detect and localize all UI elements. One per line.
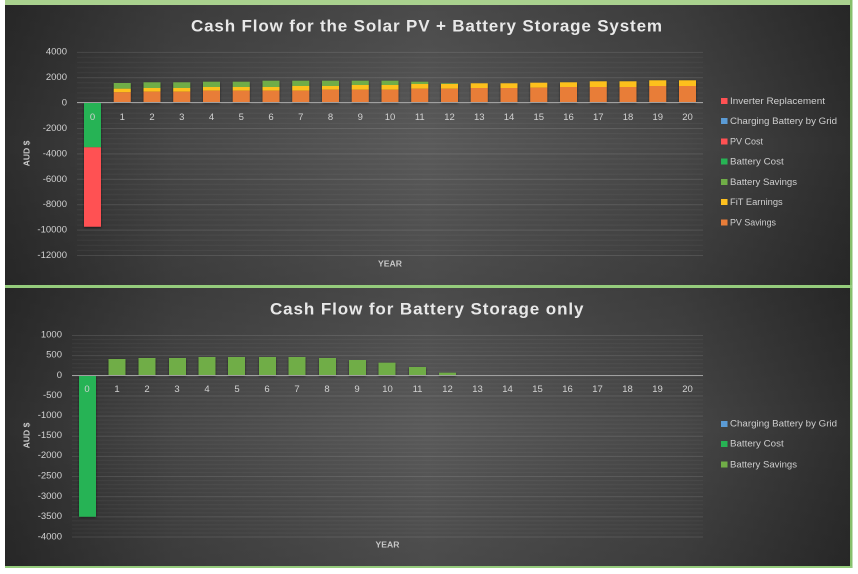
x axis labels: 12: [444, 112, 455, 123]
frame: top green border: [5, 0, 852, 5]
y axis labels: -3500: [38, 511, 62, 522]
x axis labels: 15: [533, 112, 544, 123]
y axis labels: -2000: [43, 123, 67, 134]
x axis labels: 5: [239, 112, 244, 123]
y axis labels: 4000: [46, 46, 67, 57]
y axis labels: 0: [62, 97, 67, 108]
x axis labels: 15: [532, 384, 543, 395]
x axis labels: 7: [298, 112, 303, 123]
x axis labels: 5: [234, 384, 240, 395]
y axis labels: -6000: [43, 174, 67, 185]
y axis title: AUD $: [22, 140, 32, 166]
x axis labels: 17: [593, 112, 604, 123]
x axis labels: 3: [174, 384, 180, 395]
legend: [721, 419, 837, 470]
x axis labels: 3: [179, 112, 184, 123]
x axis labels: 10: [385, 112, 395, 123]
y axis labels: 500: [46, 349, 62, 360]
x axis labels: 14: [502, 384, 513, 395]
y axis labels: -500: [43, 390, 62, 401]
stacked bar chart: [84, 80, 696, 227]
x axis labels: 8: [324, 384, 330, 395]
x axis labels: 16: [563, 112, 574, 123]
x axis labels: 0: [84, 384, 90, 395]
panel: solar PV plus battery cash flow: [5, 5, 850, 285]
legend: [721, 96, 837, 229]
panel: battery storage only cash flow: [5, 288, 850, 566]
x axis labels: 12: [442, 384, 453, 395]
x axis labels: 19: [652, 384, 663, 395]
y axis labels: -2000: [38, 450, 62, 461]
x axis labels: 20: [682, 112, 693, 123]
x axis labels: 4: [204, 384, 210, 395]
frame: right green border: [850, 0, 852, 568]
x axis labels: 13: [472, 384, 483, 395]
legend: Battery Cost: [730, 156, 784, 167]
legend: Charging Battery by Grid: [730, 116, 837, 127]
y axis labels: -3000: [38, 491, 62, 502]
y axis title: AUD $: [22, 422, 32, 448]
y axis labels: -8000: [43, 199, 67, 210]
x axis labels: 18: [623, 112, 633, 123]
legend: FiT Earnings: [730, 197, 783, 208]
x axis labels: 4: [209, 112, 214, 123]
y axis labels: -1500: [38, 430, 62, 441]
x axis labels: 6: [264, 384, 270, 395]
x axis labels: 6: [268, 112, 274, 123]
x axis labels: 11: [415, 112, 425, 123]
x axis labels: 10: [382, 384, 393, 395]
x axis labels: 1: [114, 384, 120, 395]
x axis labels: 7: [294, 384, 300, 395]
title: Cash Flow for Battery Storage only: [270, 300, 584, 318]
x axis labels: 9: [354, 384, 360, 395]
x axis labels: 17: [592, 384, 603, 395]
y axis labels: 1000: [41, 329, 62, 340]
legend: Charging Battery by Grid: [730, 419, 837, 430]
y axis labels: -4000: [43, 148, 67, 159]
x axis labels: 13: [474, 112, 485, 123]
x axis labels: 20: [682, 384, 693, 395]
x axis labels: 16: [562, 384, 573, 395]
legend: PV Savings: [730, 218, 776, 229]
bar chart: [79, 357, 456, 517]
x axis labels: 2: [144, 384, 150, 395]
y axis labels: -1000: [38, 410, 62, 421]
y axis labels: [37, 46, 67, 261]
panel background: [5, 5, 850, 285]
x axis labels: 2: [149, 112, 155, 123]
title: Cash Flow for the Solar PV + Battery Storage System: [191, 16, 662, 36]
y axis labels: -4000: [38, 531, 62, 542]
x axis labels: 14: [504, 112, 514, 123]
y axis labels: [38, 329, 62, 542]
x axis labels: 0: [90, 112, 95, 123]
x axis labels: 8: [328, 112, 333, 123]
frame: middle green divider: [5, 285, 852, 288]
legend: PV Cost: [730, 136, 763, 147]
x axis labels: 11: [413, 384, 422, 395]
x axis labels: [84, 384, 693, 395]
x axis labels: 9: [358, 112, 363, 123]
x axis title: YEAR: [378, 258, 403, 268]
y axis labels: -2500: [38, 470, 62, 481]
y axis labels: -10000: [37, 224, 67, 235]
x axis labels: 19: [652, 112, 663, 123]
legend: Battery Cost: [730, 439, 784, 450]
x axis labels: 1: [120, 112, 125, 123]
y axis labels: -12000: [37, 250, 67, 261]
x axis labels: 18: [622, 384, 633, 395]
legend: Inverter Replacement: [730, 96, 825, 107]
x axis labels: [90, 112, 693, 123]
legend: Battery Savings: [730, 177, 797, 188]
legend: Battery Savings: [730, 459, 797, 470]
y axis labels: 0: [57, 370, 62, 381]
frame: bottom green border: [5, 566, 852, 568]
panel background: [5, 288, 850, 566]
x axis title: YEAR: [376, 540, 400, 550]
y axis labels: 2000: [46, 72, 67, 83]
